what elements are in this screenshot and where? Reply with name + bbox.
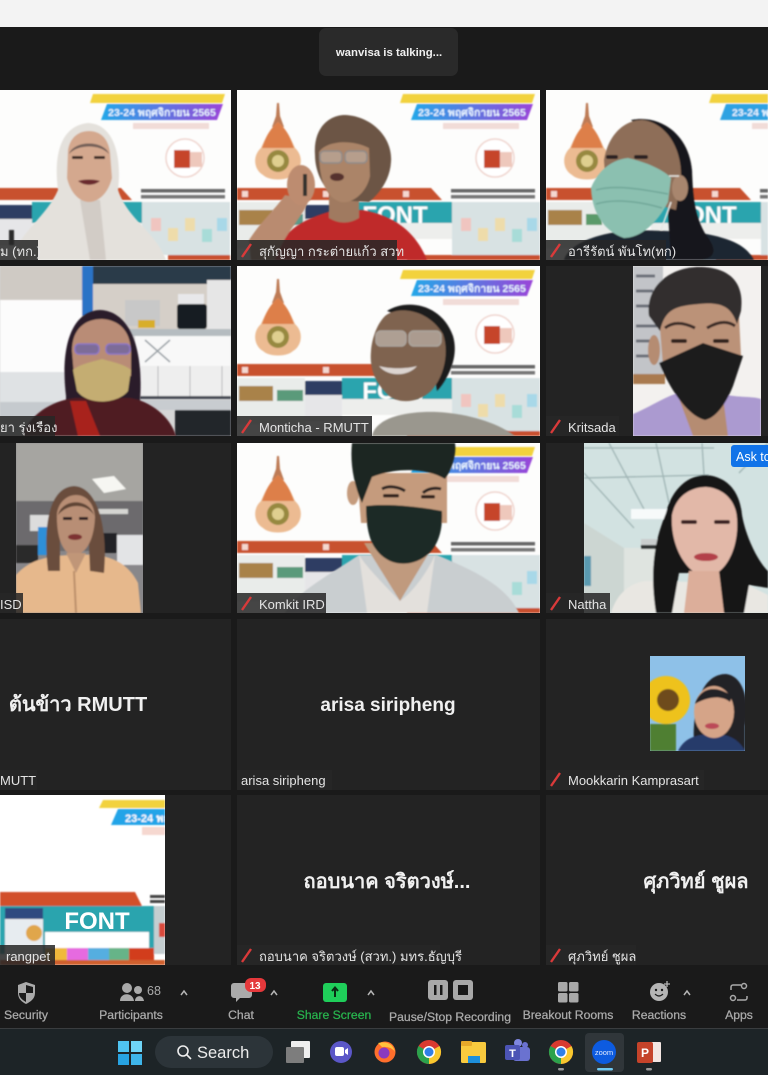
- name label: ม (ทก.): [0, 244, 41, 259]
- name tile: row 5 centre: ถอบนาค จริตวงษ์...: [304, 870, 470, 893]
- windows start icon: [118, 1041, 142, 1065]
- search box: [155, 1036, 273, 1068]
- name label: [546, 593, 610, 613]
- name tile: row 5 right: ศุภวิทย์ ชูผล: [643, 870, 749, 895]
- ask to unmute button: [731, 445, 768, 467]
- apps button: Apps: [725, 1008, 753, 1022]
- name label: ยา รุ่งเรือง: [0, 420, 57, 436]
- chat button: [228, 978, 277, 1022]
- name label: Komkit IRD: [259, 597, 325, 612]
- video tile: row 2 left, woman by shelves: [0, 266, 231, 436]
- name tile: row 5 right: [546, 795, 768, 965]
- name label: [546, 416, 619, 436]
- pause and stop recording button: Pause/Stop Recording: [389, 1010, 511, 1024]
- active speaker banner: [319, 28, 458, 76]
- name label: rangpet: [6, 949, 50, 964]
- name label: [237, 416, 372, 436]
- firefox icon: [374, 1042, 396, 1062]
- name label: อารีรัตน์ พันโท(ทก): [568, 244, 676, 259]
- share screen button: [297, 983, 374, 1022]
- name label: [0, 945, 55, 965]
- name tile: row 4 centre: arisa siripheng: [320, 695, 456, 716]
- task view icon: [286, 1041, 310, 1063]
- chat button: Chat: [228, 1008, 254, 1022]
- name tile: row 4 left: [0, 619, 231, 790]
- name label: ศุภวิทย์ ชูผล: [568, 949, 636, 965]
- participants button: [99, 983, 187, 1022]
- video tile: row 1 centre, woman on phone: [237, 90, 540, 260]
- name tile: row 4 right with profile photo: [546, 619, 768, 790]
- profile photo: [650, 656, 745, 751]
- video tile: row 2 centre, woman with glasses: FONT: [362, 378, 428, 405]
- video tile: row 5 left, slide only: FONT: [64, 908, 130, 935]
- name label: [237, 593, 326, 613]
- chrome icon: [417, 1040, 441, 1064]
- meet icon: [330, 1041, 352, 1063]
- name label: [237, 770, 332, 790]
- chat button: 13: [249, 981, 261, 992]
- apps button: [725, 984, 753, 1022]
- reactions button: Reactions: [632, 1008, 686, 1022]
- name label: Kritsada: [568, 420, 616, 435]
- name tile: row 4 left: ต้นข้าว RMUTT: [9, 693, 147, 716]
- name label: MUTT: [0, 773, 36, 788]
- top white strip: [0, 0, 768, 27]
- name label: Nattha: [568, 597, 607, 612]
- video tile: row 1 centre, woman on phone: 23-24 พฤศจิกายน 2565: [418, 107, 526, 119]
- teams icon: T: [509, 1048, 516, 1060]
- search box: Search: [197, 1044, 249, 1062]
- zoom app icon: zoom: [595, 1048, 613, 1057]
- name tile: row 4 centre: [237, 619, 540, 790]
- video tile: row 3 centre, man with mask and slide background: [237, 443, 540, 613]
- video tile: row 1 right, woman in teal mask: FONT: [671, 202, 737, 229]
- chrome icon second window: [549, 1040, 573, 1070]
- zoom toolbar: [0, 965, 768, 1029]
- participants button: Participants: [99, 1008, 163, 1022]
- security button: Security: [4, 1008, 49, 1022]
- name tile: row 5 centre: [237, 795, 540, 965]
- video tile: row 5 left, slide only: 23-24 พฤ: [125, 813, 170, 825]
- powerpoint icon: P: [641, 1046, 649, 1060]
- name label: สุกัญญา กระต่ายแก้ว สวท: [259, 244, 404, 260]
- video tile: row 5 left, slide only: [0, 795, 231, 965]
- video tile: row 1 right, woman in teal mask: 23-24 พ: [732, 107, 768, 119]
- file explorer icon: [461, 1041, 486, 1063]
- name label: [237, 240, 404, 260]
- video tile: row 2 centre, woman with glasses: [237, 266, 540, 436]
- name label: [546, 770, 704, 790]
- breakout rooms button: Breakout Rooms: [523, 1008, 613, 1022]
- name label: ถอบนาค จริตวงษ์ (สวท.) มทร.ธัญบุรี: [259, 949, 462, 965]
- reactions button: [632, 981, 690, 1022]
- video tile: row 3 left, woman in office: [0, 443, 231, 613]
- name label: [237, 945, 462, 965]
- video tile: row 2 centre, woman with glasses: 23-24 พฤศจิกายน 2565: [418, 283, 526, 295]
- security button: [4, 982, 49, 1022]
- name label: Mookkarin Kamprasart: [568, 773, 699, 788]
- name label: arisa siripheng: [241, 773, 326, 788]
- name label: ISD: [0, 597, 22, 612]
- video tile: row 3 right, woman in office: [546, 443, 768, 613]
- name label: [546, 240, 676, 260]
- video tile: row 1 left, hijab speaker: 23-24 พฤศจิกายน 2565: [108, 107, 216, 119]
- participants button: 68: [147, 984, 161, 998]
- teams icon: [505, 1039, 530, 1061]
- powerpoint icon: [637, 1042, 661, 1070]
- zoom app icon: [585, 1033, 624, 1072]
- video tile: row 3 centre, man with mask and slide background: 23-24 พฤศจิกายน 2565: [418, 460, 526, 472]
- video tile: row 1 left, hijab speaker: [0, 90, 231, 260]
- breakout rooms button: [523, 982, 613, 1022]
- pause and stop recording button: [389, 980, 511, 1024]
- name label: [546, 945, 636, 965]
- video tile: row 1 centre, woman on phone: FONT: [362, 202, 428, 229]
- name label: Monticha - RMUTT: [259, 420, 369, 435]
- share screen button: Share Screen: [297, 1008, 371, 1022]
- video tile: row 1 right, woman in teal mask: [546, 90, 768, 260]
- active speaker banner: wanvisa is talking...: [335, 47, 442, 59]
- video tile: row 2 right, man in black mask: [546, 266, 768, 436]
- windows taskbar: [0, 1028, 768, 1075]
